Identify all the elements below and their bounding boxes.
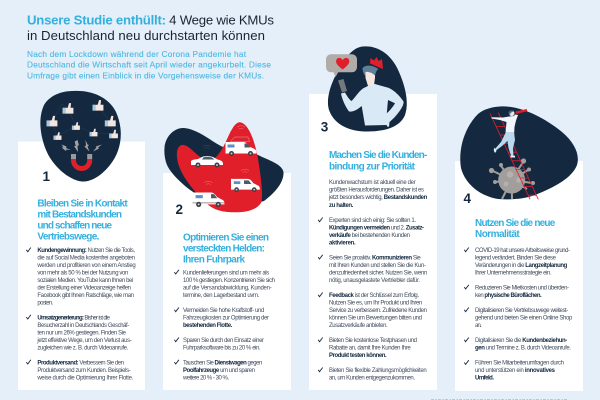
illustration: man on ladder over virus (460, 106, 578, 199)
list item: Kundengewinnung: werden und profitieren von einem Anstieg (36, 263, 136, 269)
intro text (27, 49, 271, 80)
list item: Zahlungsmöglichkeiten: an, um Kunden entgegenzukommen. (329, 376, 415, 382)
list item: Kommunizieren: denzufriedenheit sicher. Nutzen Sie, wenn (329, 270, 427, 276)
intro text 3: Kundenwachstum ist aktuell eine der (329, 180, 416, 186)
list item: Mitarbeiterumfragen: Führen Sie Mitarbeiterumfragen durch (475, 361, 564, 367)
list item: Langzeitplanung: COVID-19 hat unsere Arbeitsweise grund- (475, 248, 570, 254)
title: Unsere Studie enthüllt: 4 Wege wie KMUs (27, 12, 274, 28)
list item: Produktversand: Produktversand: Verbessern Sie den (37, 360, 124, 366)
intro text: Nach dem Lockdown während der Corona Pandemie hat (27, 49, 247, 59)
footer line: cropped at the page edge (431, 398, 567, 400)
list item: Feedback: Feedback ist der Schlüssel zum Erfolg. (329, 293, 419, 299)
list item: Testphasen: Rabatte an, damit Ihre Kunden Ihre (329, 346, 411, 352)
list item: Mitarbeiterumfragen: Umfeld. (475, 376, 494, 382)
list item: Poolfahrzeuge: Poolfahrzeuge um und sparen (183, 368, 255, 374)
intro text: Umfrage gibt einen Einblick in die Vorgehensweise der KMUs. (27, 70, 264, 80)
list item: Kraftstoffkosten: bestehenden Flotte. (183, 323, 233, 329)
list item: Kundengewinnung: posten. (37, 300, 54, 306)
list item: Experten (318, 218, 424, 246)
list item: Feedback: Zusatzverkäufe anbieten. (329, 323, 388, 329)
list item: Poolfahrzeuge: Tauschen Sie Dienstwagen gegen (183, 360, 262, 366)
list item: Fuhrparksoftware: Sparen Sie durch den Einsatz einer (183, 338, 264, 344)
list item: Zahlungsmöglichkeiten (318, 368, 427, 382)
list item: Büroflächen (464, 285, 569, 299)
list item: Umsatzgenerierung (26, 315, 132, 351)
list item: Kundengewinnung: der Erstellung einer Videoanzeige helfen (37, 286, 131, 292)
list item: Langzeitplanung: legend verändert. Binden Sie diese (475, 256, 557, 262)
list item: Kundenbeziehungen: Digitalisieren Sie die Kundenbeziehun- (475, 338, 567, 344)
list item: Poolfahrzeuge (174, 360, 262, 381)
list item: Umsatzgenerierung: ten nur um 26% gestiegen. Finden Sie (37, 330, 127, 336)
illustration: person with crown and phone (326, 46, 407, 132)
list item: Testphasen: Produkt testen können. (329, 353, 387, 359)
number 1: 1 (42, 169, 50, 184)
list item: Vertriebswege: Digitalisieren Sie Vertriebsuwege weitest- (475, 308, 568, 314)
list item: Langzeitplanung (464, 248, 570, 276)
heading 2: Optimieren Sie einen (183, 232, 269, 244)
list item: Kommunizieren (318, 255, 427, 284)
list item: Vertriebswege: gehend und bieten Sie einen Online Shop (475, 316, 573, 322)
intro text 3: größten Herausforderungen. Daher ist es (329, 188, 424, 194)
list item: Experten: aktivieren. (329, 240, 356, 246)
list item: Kommunizieren: mit Ihren Kunden und stellen Sie die Kun- (329, 263, 426, 269)
list item: Testphasen (318, 338, 417, 359)
list item: Zahlungsmöglichkeiten: Bieten Sie flexible Zahlungsmöglichkeiten (329, 368, 427, 374)
panel: 4 neue Normalität (455, 106, 583, 391)
list item: Mitarbeiterumfragen (464, 360, 564, 382)
list item: Umsatzgenerierung: jetzt effektive Wege, um den Verlust aus- (36, 338, 132, 344)
list item: Vertriebswege (464, 308, 573, 329)
list item: Produktversand (26, 360, 134, 381)
panel: 1 Kontakt mit Bestandskunden (18, 91, 145, 390)
list item: Langzeitplanung: Ihrer Unternehmensstrategie ein. (475, 270, 552, 276)
number 3: 3 (321, 120, 329, 135)
list item: Poolfahrzeuge: weitere 20 % - 30 %. (182, 375, 229, 381)
list item: Büroflächen: ken physische Büroflächen. (475, 293, 542, 299)
list item: Feedback: Nutzen Sie es, um Ihr Produkt und Ihren (329, 300, 422, 306)
number 2: 2 (176, 202, 183, 217)
list item: Produktversand: weise durch die Optimierung Ihrer Flotte. (36, 375, 134, 381)
heading 1: mit Bestandskunden (37, 210, 122, 220)
list item: Kundenbeziehungen (464, 338, 571, 352)
illustration: fleet of vans on red blob (164, 122, 284, 212)
heading 1: Vertriebswege. (37, 232, 100, 242)
heading 4 (475, 218, 556, 240)
heading 3: Machen Sie die Kunden- (329, 150, 427, 161)
intro text 3 (328, 180, 428, 209)
heading 3: bindung zur Priorität (329, 162, 416, 172)
list item: Kundengewinnung: Facebook gibt Ihnen Ratschläge, wie man (37, 293, 134, 299)
list item: Kundenlieferungen: auf die Versandabwicklung, Kunden- (183, 285, 272, 291)
list item: Fuhrparksoftware: Fuhrparksoftware bis zu 20 % ein. (183, 346, 261, 352)
list item: Fuhrparksoftware (174, 338, 264, 352)
list item: Kundengewinnung: die auf Social Media kostenfrei angeboten (37, 256, 135, 262)
list item: Feedback: Service zu verbessern. Zufriedene Kunden (329, 308, 427, 314)
list item: Kraftstoffkosten (174, 308, 269, 329)
list item: Experten: Experten sind sich einig: Sie sollten 1. (329, 218, 416, 224)
intro text 3: zu halten. (329, 203, 354, 209)
list item: Experten: verkäufe bei bestehenden Kunden (329, 233, 410, 239)
list item: Kundenlieferungen (174, 270, 275, 299)
list item: Vertriebswege: an. (475, 323, 482, 329)
list item: Umsatzgenerierung: Umsatzgenerierung: Bisher ist die (37, 315, 111, 321)
heading 1 (37, 198, 128, 242)
list item: Kundenbeziehungen: gen und Termine z. B. durch Videoanrufe. (475, 346, 571, 352)
list item: Kundengewinnung: Kundengewinnung: Nutzen Sie die Tools, (37, 248, 135, 254)
list item: Kraftstoffkosten: Vermeiden Sie hohe Kraftstoff- und (183, 308, 264, 314)
list item: Kundenlieferungen: termine, den Lagerbestand uvm. (183, 293, 260, 299)
title (27, 12, 274, 43)
number 4: 4 (464, 191, 472, 206)
list item: Mitarbeiterumfragen: und unterstützen ein innovatives (475, 368, 556, 374)
heading 1: Bleiben Sie in Kontakt (37, 198, 128, 210)
list item: Feedback: können Sie um Bewertungen bitten und (329, 316, 422, 322)
list item: Kommunizieren: Seien Sie proaktiv. Kommunizieren Sie (329, 255, 421, 261)
list item: Kundengewinnung (26, 248, 136, 306)
heading 4: Normalität (475, 229, 520, 240)
list item: Experten: Kündigungen vermeiden und 2. Zusatz- (329, 226, 424, 232)
heading 2: versteckten Helden: (183, 244, 265, 254)
list item: Umsatzgenerierung: Besucherzahl in Deutschlands Geschäf- (37, 323, 129, 329)
list item: Kommunizieren: nötig, unausgelastete Vertriebler dafür. (329, 278, 420, 284)
list item: Langzeitplanung: Veränderungen in die Langzeitplanung (475, 263, 568, 269)
panel: 2 Fuhrpark (163, 122, 291, 390)
list item: Testphasen: Bieten Sie kostenlose Testphasen und (329, 338, 417, 344)
illustration: magnet attracting likes (40, 91, 121, 182)
list item: Produktversand: Produktversand zum Kunden. Beispiels- (37, 368, 131, 374)
intro text: Deutschland die Wirtschaft seit April wieder angekurbelt. Diese (27, 60, 271, 70)
list item: Kraftstoffkosten: Fahrzeugkosten zur Optimierung der (183, 316, 269, 322)
heading 2: Ihren Fuhrpark (183, 254, 245, 266)
list item: Büroflächen: Reduzieren Sie Mietkosten und überden- (475, 285, 569, 291)
title: in Deutschland neu durchstarten können (27, 28, 265, 43)
list item: Kundenlieferungen: Kundenlieferungen sind um mehr als (183, 270, 269, 276)
list item: Feedback (318, 292, 427, 329)
heading 4: Nutzen Sie die neue (475, 218, 556, 229)
panel: 3 Kundenbindung (309, 46, 437, 390)
list item: Umsatzgenerierung: zugleichen wie z. B. durch Videoanrufe. (37, 345, 129, 351)
heading 3 (329, 150, 427, 172)
list item: Kundengewinnung: von mehr als 50 % bei der Nutzung von (37, 270, 128, 276)
list item: Kundengewinnung: sozialen Medien. YouTube kann Ihnen bei (37, 278, 133, 284)
list item: Kundenlieferungen: 100 % gestiegen. Konzentrieren Sie sich (183, 278, 275, 284)
intro text 3: jetzt besonders wichtig, Bestandskunden (328, 195, 428, 201)
heading 2 (183, 232, 269, 266)
heading 1: und schaffen neue (37, 220, 112, 232)
